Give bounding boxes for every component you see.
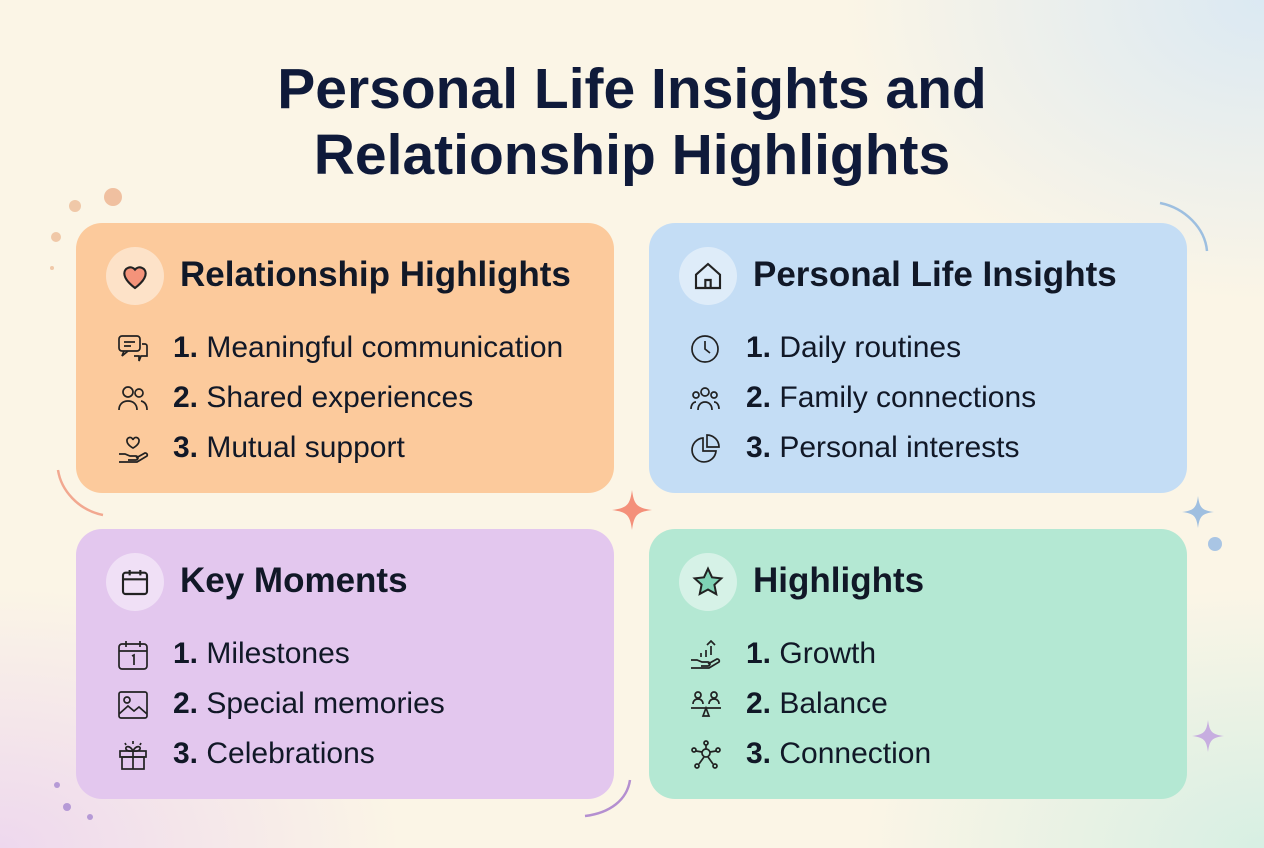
heading: Personal Life Insights bbox=[753, 255, 1117, 294]
heading: Key Moments bbox=[180, 561, 408, 600]
heading: Highlights bbox=[753, 561, 924, 600]
item 3: 3. Mutual support bbox=[173, 431, 405, 464]
item 3: 3. Personal interests bbox=[746, 431, 1019, 464]
item 2: 2. Special memories bbox=[173, 687, 445, 720]
icon: star bbox=[679, 553, 737, 611]
panel: relationship highlights bbox=[76, 223, 614, 493]
decorative sparkle right bbox=[1182, 496, 1214, 528]
item 3: 3. Celebrations bbox=[173, 737, 375, 770]
title bbox=[277, 57, 987, 187]
panel: key moments bbox=[76, 529, 614, 799]
panel: highlights bbox=[649, 529, 1187, 799]
item 1: 1. Growth bbox=[746, 637, 876, 670]
icon: calendar bbox=[106, 553, 164, 611]
heading: Relationship Highlights bbox=[180, 255, 571, 294]
item 3: 3. Connection bbox=[746, 737, 931, 770]
item 1: 1. Meaningful communication bbox=[173, 331, 563, 364]
icon: heart bbox=[106, 247, 164, 305]
panel: personal life insights bbox=[649, 223, 1187, 493]
item 2: 2. Balance bbox=[746, 687, 888, 720]
title: Personal Life Insights and bbox=[277, 57, 987, 121]
decorative dots top-left bbox=[50, 188, 122, 270]
item 1: 1. Milestones bbox=[173, 637, 350, 670]
decorative sparkle center bbox=[612, 490, 652, 530]
item 1: 1. Daily routines bbox=[746, 331, 961, 364]
item 2: 2. Shared experiences bbox=[173, 381, 473, 414]
title: Relationship Highlights bbox=[314, 123, 950, 187]
item 2: 2. Family connections bbox=[746, 381, 1036, 414]
icon: house bbox=[679, 247, 737, 305]
